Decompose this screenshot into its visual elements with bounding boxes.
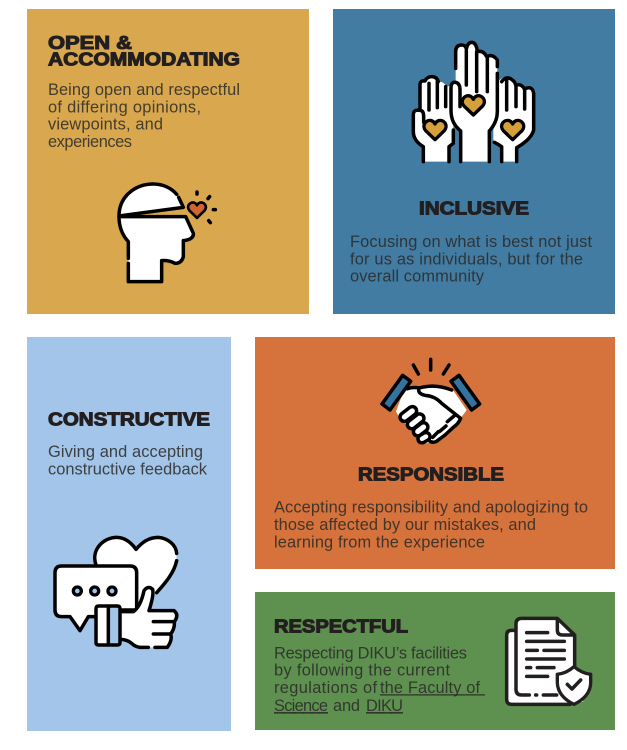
text: respectful description: Respecting DIKU’s facilities [274, 644, 467, 662]
text: respectful description: regulations of [274, 679, 377, 697]
text: constructive description: constructive feedback [48, 460, 208, 478]
text: open description: Being open and respectful [48, 81, 240, 99]
text: respectful description: by following the current [274, 662, 450, 680]
text: open description [48, 81, 240, 151]
heading: open and accommodating: ACCOMMODATING [48, 50, 240, 70]
text: inclusive description: for us as individuals, but for the [350, 250, 583, 268]
heading: constructive: CONSTRUCTIVE [48, 410, 210, 430]
text: inclusive description: Focusing on what is best not just [350, 233, 592, 251]
panel: responsible [255, 337, 615, 569]
text: open description: viewpoints, and [48, 116, 163, 134]
text: respectful description: the Faculty of [380, 679, 480, 697]
heading: respectful: RESPECTFUL [274, 616, 408, 636]
panel: inclusive [333, 9, 615, 314]
text: responsible description: learning from the experience [274, 533, 485, 551]
text: inclusive description: overall community [350, 268, 485, 286]
icon: speech bubble heart and thumbs up [55, 537, 177, 647]
heading: open and accommodating [48, 33, 240, 70]
panel: respectful [255, 592, 615, 730]
text: open description: experiences [48, 133, 132, 151]
icon: raised hands with hearts [413, 42, 534, 162]
text: constructive description [48, 443, 208, 478]
text: inclusive description [350, 233, 592, 286]
text: responsible description: those affected by our mistakes, and [274, 516, 536, 534]
text: responsible description [274, 499, 588, 551]
center hand [451, 42, 497, 162]
heading: inclusive: INCLUSIVE [419, 198, 529, 218]
icon: document with shield [507, 618, 591, 704]
heading: responsible: RESPONSIBLE [358, 465, 504, 485]
text: responsible description: Accepting responsibility and apologizing to [274, 499, 588, 517]
text: respectful description [274, 644, 485, 715]
left hand [413, 77, 453, 162]
icon: handshake [382, 359, 480, 444]
icon: open head with heart [119, 184, 215, 282]
panel: open and accommodating [27, 9, 309, 314]
text: respectful description: Science [274, 697, 328, 715]
panel: constructive [27, 337, 231, 731]
right hand [493, 77, 534, 162]
text: constructive description: Giving and accepting [48, 443, 203, 461]
text: open description: of differing opinions, [48, 98, 201, 116]
text: respectful description: and [333, 697, 360, 715]
text: respectful description: DIKU [366, 697, 403, 715]
heading: open and accommodating: OPEN & [48, 33, 132, 53]
